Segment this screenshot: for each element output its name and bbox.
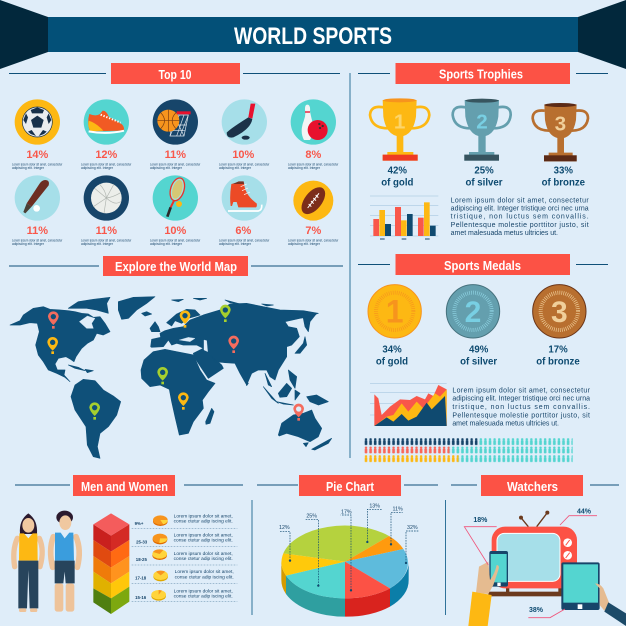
small captions: Lorem ipsum dolor sit amet, consectetur xyxy=(288,163,339,167)
percentages: 10% xyxy=(164,225,187,237)
paragraph: amet malesuada metus ultricies ut. xyxy=(452,420,559,427)
icon: bronze medal xyxy=(533,285,586,338)
medal stats: of gold xyxy=(376,357,408,368)
heading: Watchers: Watchers xyxy=(507,479,558,494)
pie leader dots xyxy=(289,541,407,591)
map: Americas and Greenland xyxy=(10,297,155,458)
age table text: Lorem ipsum dolor sit amet, xyxy=(174,588,233,593)
heading: Sports Medals xyxy=(396,254,570,275)
percentages: 12% xyxy=(95,149,118,161)
trophy stats: 33% xyxy=(554,165,573,176)
small captions: adipiscing elit. Integer xyxy=(150,166,183,170)
heading: Men and Women: Men and Women xyxy=(81,479,168,494)
map pins xyxy=(47,305,304,421)
icon: silver medal: 2 xyxy=(465,296,481,329)
paragraph: Lorem ipsum dolor sit amet, consectetur xyxy=(451,197,589,204)
pie labels: 17% xyxy=(341,509,352,515)
icon: ice skate xyxy=(222,175,267,221)
age labels: 9%+ xyxy=(135,521,144,526)
pie labels: 12% xyxy=(279,525,290,531)
trophy stats: of silver xyxy=(465,177,503,188)
age table text: conse ctetur adip iscing elit. xyxy=(174,593,233,598)
callout: 18% xyxy=(464,517,497,565)
percentages: 8% xyxy=(305,149,321,161)
icon: soccer ball xyxy=(15,99,60,145)
small captions: Lorem ipsum dolor sit amet, consectetur xyxy=(12,239,63,243)
callout: 38% xyxy=(528,607,565,618)
paragraph: tristique, non luctus sem convallis. xyxy=(451,214,589,221)
age table text: Lorem ipsum dolor sit amet, xyxy=(175,569,234,574)
icon: silver trophy xyxy=(453,99,511,161)
paragraph: amet malesuada metus ultricies ut. xyxy=(451,230,558,237)
panel: sports medals xyxy=(364,285,591,463)
3d pie xyxy=(281,526,409,617)
percentages: 14% xyxy=(26,149,49,161)
isometric stacked column xyxy=(93,513,129,614)
age table text: conse ctetur adip iscing elit. xyxy=(174,519,233,524)
callout: 44% xyxy=(560,508,597,525)
small captions: Lorem ipsum dolor sit amet, consectetur xyxy=(81,163,132,167)
pie labels: 11% xyxy=(393,507,403,513)
icon: television xyxy=(488,511,577,596)
percentages: 11% xyxy=(27,225,48,237)
icon: bronze trophy: 3 xyxy=(555,113,566,136)
paragraph xyxy=(451,197,589,237)
medal stats: 49% xyxy=(469,345,489,356)
percentages: 11% xyxy=(96,225,117,237)
small captions: Lorem ipsum dolor sit amet, consectetur xyxy=(12,163,63,167)
icon: hand with tablet xyxy=(561,562,626,626)
icon: bronze trophy xyxy=(533,103,588,161)
mini pie icons xyxy=(151,515,168,601)
age labels xyxy=(135,521,148,600)
small captions: adipiscing elit. Integer xyxy=(288,242,321,246)
age table text: Lorem ipsum dolor sit amet, xyxy=(174,514,233,519)
panel: pie chart xyxy=(279,503,418,617)
trophy stats xyxy=(381,165,586,188)
callout: 18%: 18% xyxy=(473,517,488,524)
heading: Watchers xyxy=(481,475,583,496)
small captions: Lorem ipsum dolor sit amet, consectetur xyxy=(150,163,201,167)
icon: tennis racket xyxy=(153,175,198,221)
title: WORLD SPORTS xyxy=(234,23,392,50)
icon: gold medal: 1 xyxy=(386,294,404,330)
map pin: north america amber xyxy=(47,337,58,354)
trophy stats: of gold xyxy=(381,177,414,188)
map: Eurasia, Africa and Oceania xyxy=(141,298,332,450)
small captions: adipiscing elit. Integer xyxy=(219,242,252,246)
figure: woman xyxy=(14,513,42,612)
area chart xyxy=(370,384,447,426)
percentages: 6% xyxy=(235,225,251,237)
small captions: Lorem ipsum dolor sit amet, consectetur xyxy=(150,239,201,243)
medal stats xyxy=(376,345,580,368)
icon: silver medal xyxy=(446,285,500,338)
age table dividers xyxy=(132,528,237,602)
heading: Pie Chart xyxy=(299,475,401,496)
small captions: adipiscing elit. Integer xyxy=(219,166,252,170)
medal stats: of bronze xyxy=(536,357,580,368)
paragraph: adipiscing elit. Integer tristique orci nec urna xyxy=(451,205,589,212)
heading: Explore the World Map xyxy=(103,256,248,276)
callout: 38%: 38% xyxy=(529,607,544,614)
pie leader lines xyxy=(279,509,418,590)
age table text xyxy=(174,514,234,598)
heading: Sports Trophies xyxy=(396,63,570,84)
trophy stats: 25% xyxy=(474,165,494,176)
small captions: Lorem ipsum dolor sit amet, consectetur xyxy=(288,239,339,243)
age table text: conse ctetur adip iscing elit. xyxy=(175,574,234,579)
icon: silver trophy: 2 xyxy=(476,110,488,133)
medal stats: 17% xyxy=(548,345,568,356)
trophy stats: 42% xyxy=(388,165,407,176)
heading: Top 10: Top 10 xyxy=(158,67,192,82)
pie labels: 32% xyxy=(407,525,418,531)
heading: Sports Medals: Sports Medals xyxy=(444,258,521,273)
icon: baseball bat xyxy=(15,175,60,221)
icon: hand with phone xyxy=(468,551,508,626)
icon: gold trophy: 1 xyxy=(394,110,405,133)
panel: top 10 sports xyxy=(12,99,339,246)
medal stats: of silver xyxy=(460,357,497,368)
panel: men and women xyxy=(14,511,237,614)
heading: Pie Chart: Pie Chart xyxy=(326,479,375,494)
panel: sports trophies xyxy=(370,98,589,239)
small captions: Lorem ipsum dolor sit amet, consectetur xyxy=(219,163,270,167)
pie labels xyxy=(279,503,418,531)
age labels: 15-16 xyxy=(135,595,147,600)
icon: volleyball xyxy=(84,175,129,221)
panel: watchers xyxy=(464,508,626,626)
paragraph xyxy=(452,388,591,427)
paragraph: adipiscing elit. Integer tristique orci nec urna xyxy=(452,396,590,403)
age table text: Lorem ipsum dolor sit amet, xyxy=(174,551,233,556)
small captions: adipiscing elit. Integer xyxy=(81,166,114,170)
map pin: africa amber xyxy=(178,392,189,410)
paragraph: tristique, non luctus sem convallis. xyxy=(452,404,590,411)
map pin: australia red xyxy=(293,404,304,421)
small captions: Lorem ipsum dolor sit amet, consectetur xyxy=(219,239,270,243)
percentages: 10% xyxy=(232,149,255,161)
map pin: asia red xyxy=(228,336,239,353)
paragraph: Pellentesque molestie porttitor justo, sit xyxy=(452,412,590,419)
icon: bowling xyxy=(291,99,336,145)
age labels: 18-25 xyxy=(136,557,147,562)
pie labels: 13% xyxy=(369,503,380,509)
map pin: africa green xyxy=(157,367,168,384)
icon: hockey stick xyxy=(222,99,267,145)
icon: running shoe xyxy=(84,99,129,145)
small captions: adipiscing elit. Integer xyxy=(288,166,321,170)
percentages xyxy=(26,149,321,237)
trophy stats: of bronze xyxy=(542,177,586,188)
icon: american football xyxy=(293,181,333,221)
heading: Men and Women xyxy=(73,475,175,496)
map pin: south america green xyxy=(89,402,100,420)
age table text: conse ctetur adip iscing elit. xyxy=(174,537,233,542)
age labels: 17-18 xyxy=(135,576,147,581)
percentages: 11% xyxy=(165,149,186,161)
map pin: europe amber xyxy=(180,310,190,328)
small captions: adipiscing elit. Integer xyxy=(81,242,114,246)
small captions xyxy=(12,163,339,246)
callout: 44%: 44% xyxy=(577,508,592,515)
heading: Sports Trophies: Sports Trophies xyxy=(439,66,523,82)
paragraph: Lorem ipsum dolor sit amet, consectetur xyxy=(452,388,591,395)
small captions: adipiscing elit. Integer xyxy=(150,242,183,246)
bar chart xyxy=(370,196,438,239)
header banner xyxy=(0,0,626,69)
map pin: russia green xyxy=(220,305,231,322)
heading: Explore the World Map: Explore the World Map xyxy=(115,259,237,274)
pie labels: 25% xyxy=(306,514,317,520)
age table text: conse ctetur adip iscing elit. xyxy=(174,556,233,561)
age labels: 25-33 xyxy=(136,539,148,544)
figure: man xyxy=(51,511,79,612)
small captions: adipiscing elit. Integer xyxy=(12,166,45,170)
heading: Top 10 xyxy=(111,63,240,84)
small captions: adipiscing elit. Integer xyxy=(12,242,45,246)
icon: bronze medal: 3 xyxy=(551,296,568,329)
people pictogram rows xyxy=(364,438,573,463)
panel: world map xyxy=(10,297,332,458)
small captions: Lorem ipsum dolor sit amet, consectetur xyxy=(81,239,132,243)
icon: gold trophy xyxy=(370,98,429,161)
paragraph: Pellentesque molestie porttitor justo, sit xyxy=(451,222,589,229)
age table text: Lorem ipsum dolor sit amet, xyxy=(174,532,233,537)
icon: gold medal xyxy=(368,285,421,338)
percentages: 7% xyxy=(305,225,321,237)
map pin: north america red xyxy=(48,311,59,329)
icon: basketball xyxy=(153,99,198,145)
medal stats: 34% xyxy=(382,345,402,356)
